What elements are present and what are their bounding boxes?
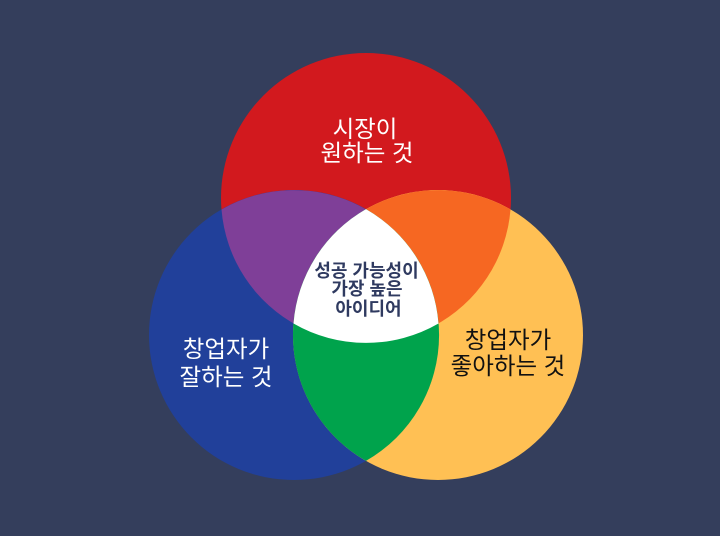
label: founder is good at: 창업자가 bbox=[183, 336, 269, 362]
label: center idea: 성공 가능성이 bbox=[314, 261, 419, 281]
label: market wants: 시장이 bbox=[333, 116, 397, 142]
label: founder likes: 좋아하는 것 bbox=[451, 353, 565, 379]
label: founder is good at: 잘하는 것 bbox=[179, 364, 273, 390]
label: center idea: 아이디어 bbox=[335, 299, 402, 319]
circle: founder likes (yellow) bbox=[293, 190, 583, 480]
overlap: red and blue (purple) bbox=[222, 190, 438, 343]
circle: founder is good at (blue) bbox=[149, 190, 439, 480]
label: center idea: 가장 높은 bbox=[331, 279, 403, 299]
overlap: blue and yellow (green) bbox=[293, 209, 439, 461]
label: market wants: 원하는 것 bbox=[320, 140, 414, 166]
center overlap (white) bbox=[294, 209, 438, 343]
overlap: red and yellow (orange) bbox=[294, 190, 510, 343]
circle: market wants (red) bbox=[221, 53, 511, 343]
label: founder likes: 창업자가 bbox=[465, 327, 551, 353]
